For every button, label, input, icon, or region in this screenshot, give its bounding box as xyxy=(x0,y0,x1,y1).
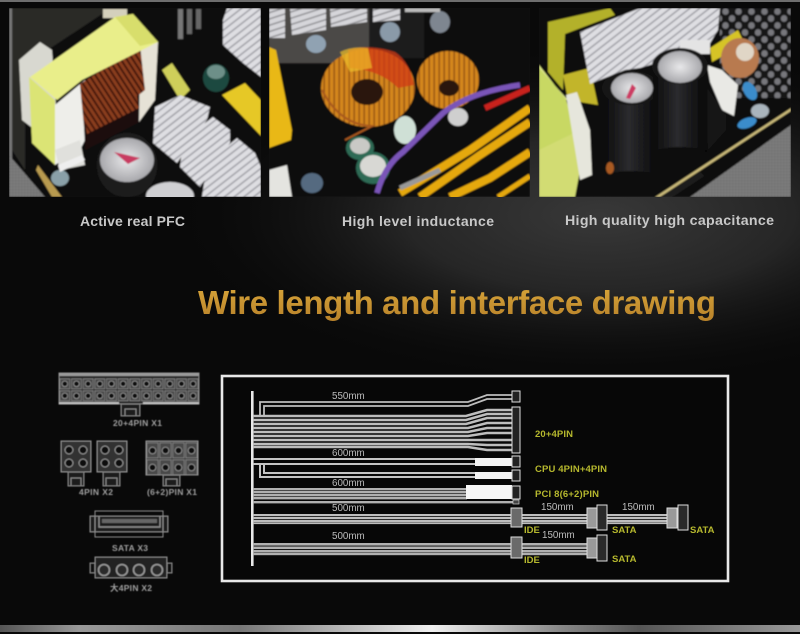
label: (6+2)PIN X1: (6+2)PIN X1 xyxy=(147,487,197,497)
wires: PCI group xyxy=(253,488,513,503)
heat sinks xyxy=(153,8,261,197)
wires: peripheral chain two xyxy=(253,543,587,555)
label: IDE lower: IDE xyxy=(524,555,540,566)
caption: Active real PFC: Active real PFC xyxy=(80,213,185,229)
icon: 20+4 pin connector xyxy=(59,373,199,416)
label: 20+4PIN X1: 20+4PIN X1 xyxy=(113,418,162,428)
caption: High level inductance: High level inductance xyxy=(342,213,494,229)
label: IDE upper: IDE xyxy=(524,525,540,536)
main capacitor xyxy=(96,132,196,197)
photo: high capacitance capacitors xyxy=(539,8,791,197)
label: CPU 4PIN+4PIN: CPU 4PIN+4PIN xyxy=(535,464,607,475)
transformer bobbin xyxy=(19,14,158,170)
blue components xyxy=(606,79,769,174)
title: Wire length and interface drawing xyxy=(198,284,716,321)
icon: large 4 pin connector xyxy=(90,557,172,578)
copper coil xyxy=(721,38,759,78)
yellow parts xyxy=(162,63,261,136)
yellow wires xyxy=(400,108,530,197)
wires: CPU group xyxy=(253,459,476,477)
photo: inductors and wires xyxy=(269,8,530,197)
label: 150mm third: 150mm xyxy=(542,530,575,541)
panel: wire length diagram xyxy=(222,376,728,581)
icon: 4 pin connector one xyxy=(61,441,91,486)
label: large 4PIN X2: 大4PIN X2 xyxy=(110,583,152,593)
label: 150mm second: 150mm xyxy=(622,502,655,513)
connector: 20+4 pin xyxy=(512,391,520,453)
small toroid inductor xyxy=(417,51,479,109)
connector: SATA two xyxy=(667,505,688,530)
rear vent mesh xyxy=(720,8,791,98)
label: 4PIN X2: 4PIN X2 xyxy=(79,487,113,497)
connector: IDE one xyxy=(511,508,522,527)
label: SATA upper one: SATA xyxy=(612,525,637,536)
label: 600mm upper: 600mm xyxy=(332,448,365,459)
case floor xyxy=(655,108,791,197)
green capacitor xyxy=(203,64,229,92)
label: 550mm: 550mm xyxy=(332,391,365,402)
wires: 20+4 pin group xyxy=(253,395,512,450)
purple wire xyxy=(377,85,520,193)
label: 20+4PIN: 20+4PIN xyxy=(535,429,573,440)
label: 150mm first: 150mm xyxy=(541,502,574,513)
large toroid inductor xyxy=(321,47,415,140)
connector: SATA one xyxy=(587,505,607,530)
red wire xyxy=(485,88,530,108)
label: PCI 8(6+2)PIN: PCI 8(6+2)PIN xyxy=(535,489,599,500)
label: SATA lower: SATA xyxy=(612,554,637,565)
green-yellow transformer xyxy=(539,65,592,197)
base bar xyxy=(251,391,254,566)
small capacitors xyxy=(269,108,468,197)
icon: 6+2 pin connector xyxy=(146,441,198,486)
yellow block xyxy=(269,47,292,148)
connector: SATA three xyxy=(587,535,607,561)
connector: PCI xyxy=(466,485,520,504)
photo: active PFC transformer xyxy=(9,8,261,210)
label: 500mm lower: 500mm xyxy=(332,531,365,542)
wires: peripheral chain one xyxy=(253,514,667,524)
capacitor two xyxy=(652,48,708,161)
capacitor one xyxy=(602,70,654,174)
label: SATA X3: SATA X3 xyxy=(112,543,148,553)
label: SATA upper two: SATA xyxy=(690,525,715,536)
panel: connector legend xyxy=(59,373,199,593)
top heat sinks xyxy=(269,8,450,53)
caption: High quality high capacitance: High quality high capacitance xyxy=(565,213,774,229)
icon: 4 pin connector two xyxy=(97,441,127,486)
label: 600mm lower: 600mm xyxy=(332,478,365,489)
connector: IDE two xyxy=(511,537,522,558)
heat sinks xyxy=(580,8,720,84)
connector: CPU 4+4 pin xyxy=(475,456,520,481)
icon: SATA connector xyxy=(90,511,168,537)
metallic footer bar xyxy=(0,625,800,632)
yellow transformer top xyxy=(548,8,745,105)
white connector xyxy=(707,65,738,116)
label: 500mm upper: 500mm xyxy=(332,503,365,514)
